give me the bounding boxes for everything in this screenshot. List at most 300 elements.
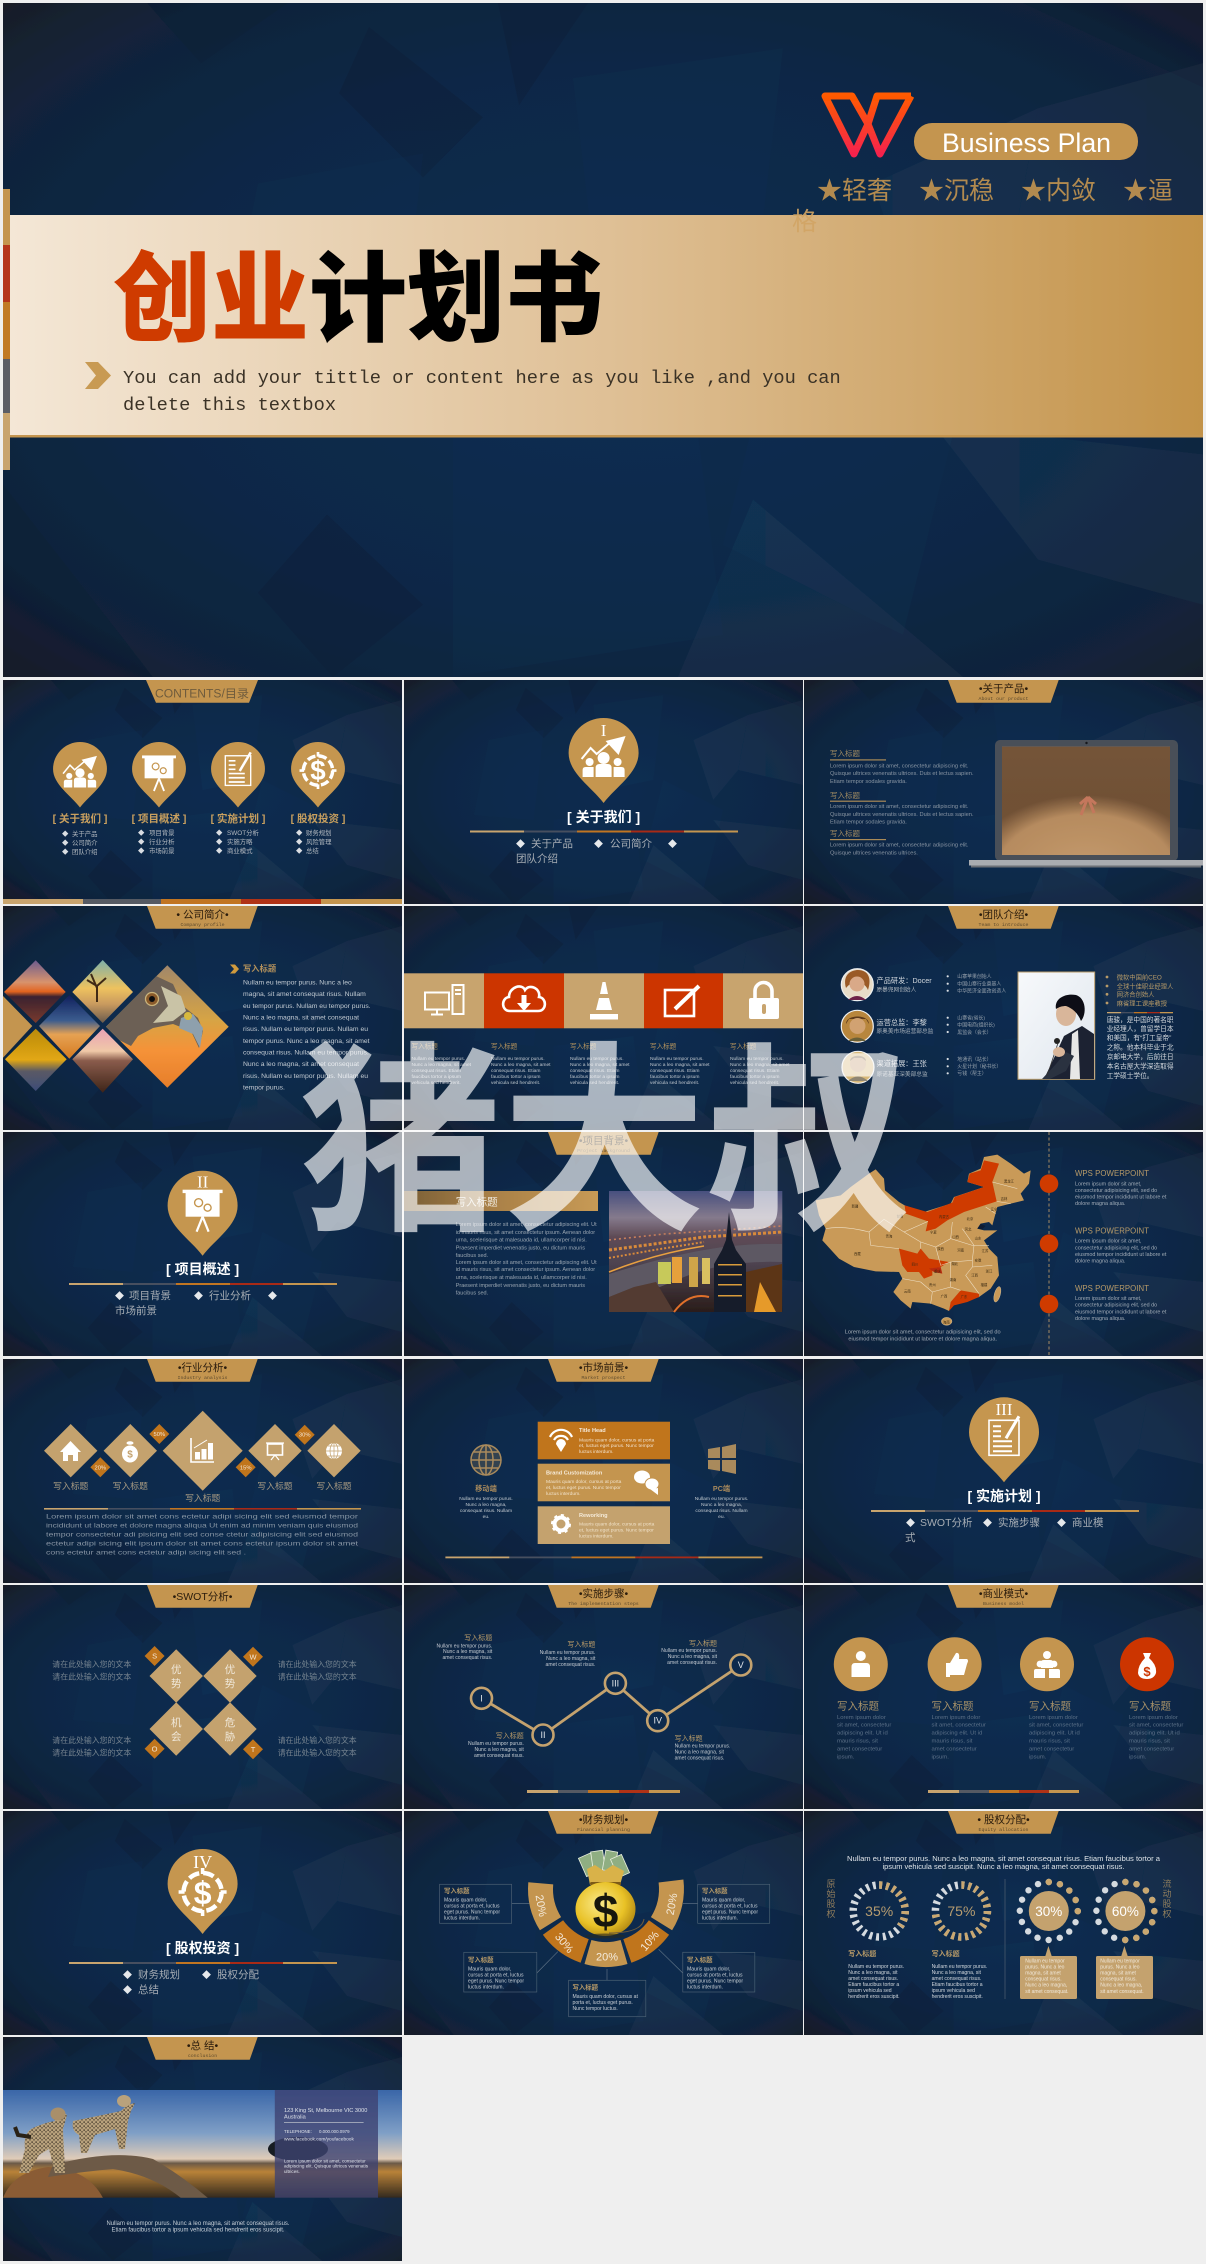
icon: board [266, 1443, 284, 1460]
column 2 text [932, 1715, 986, 1760]
map: 贵州 [929, 1282, 936, 1287]
contents list: 公司简介 [72, 838, 98, 847]
divider [1004, 1879, 1006, 1999]
biography: 本名古屋大学深造取得 [1107, 1062, 1174, 1070]
box: reworking: Reworking [579, 1513, 608, 1519]
icon: globe [471, 1445, 501, 1475]
pin: implementation plan [211, 742, 265, 808]
contents list: 关于产品 [72, 829, 98, 838]
SWOT diamonds: 胁 [225, 1730, 236, 1743]
names: 原奥美市场运营部总监 [876, 1027, 934, 1035]
text block [243, 964, 371, 1092]
text block right: hendrerit eros suscipit. [932, 1994, 983, 2000]
panel: section III [804, 1359, 1203, 1583]
column 3 text: ipsum. [1029, 1754, 1047, 1760]
circle: money [1120, 1637, 1174, 1691]
icon: house [60, 1441, 81, 1461]
map: 四川 [912, 1263, 918, 1267]
column text 4: Nunc a leo magna, sit amet [650, 1062, 710, 1068]
heading band: 写入标题 [456, 1196, 498, 1208]
column 1 text: ipsum. [837, 1754, 855, 1760]
vertical label: floating equity: 流 [1162, 1878, 1172, 1889]
contents headings: [ 关于我们 ] [53, 812, 107, 825]
map: 山东 [975, 1235, 982, 1240]
icon: W logo [825, 96, 911, 154]
map: 陕西 [937, 1246, 945, 1251]
SWOT diamonds: 优 [225, 1663, 235, 1676]
tab [548, 1811, 659, 1834]
names: 渠道拓展：王张 [876, 1059, 927, 1068]
SWOT right text: 请在此处输入您的文本 [278, 1748, 357, 1758]
callout 4: luctus interdum. [687, 1984, 723, 1990]
biography: 工学硕士学位。 [1107, 1071, 1154, 1080]
section list: 商业模 [1072, 1516, 1104, 1529]
text block right [932, 1949, 987, 2000]
speech box 2: purus. Nunc a leo [1100, 1964, 1140, 1970]
gauge 30% [1020, 1882, 1078, 1940]
column 4 text: amet consectetur [1129, 1746, 1174, 1752]
section heading: [ 股权投资 ] [166, 1940, 239, 1956]
column 1 text: mauris risus, sit [837, 1738, 878, 1744]
icon: money bag: $ [593, 1885, 618, 1937]
step text I [437, 1633, 493, 1661]
pin: project overview [132, 742, 186, 808]
percent tags [90, 1424, 315, 1477]
ring segments: 20% [596, 1952, 618, 1964]
column 2 text: adipiscing elit. Ut id [932, 1730, 982, 1736]
icon: money bag [122, 1441, 138, 1462]
contents list: ◆ [296, 838, 303, 846]
speech box 1: magna, sit amet [1025, 1970, 1061, 1976]
section list: 总结 [138, 1983, 159, 1996]
contact panel: TELEPHONE: [284, 2129, 312, 2134]
map: 宁夏 [930, 1230, 937, 1235]
tab [548, 1585, 659, 1608]
contents list: ◆ [216, 829, 223, 837]
text block 1: Etiam tempor sodales gravida. [830, 779, 907, 785]
column 4 text: mauris risus, sit [1129, 1738, 1170, 1744]
step text IV: amet consequat risus. [675, 1756, 724, 1762]
step text II: Nullam eu tempor purus. [468, 1741, 524, 1747]
callout 5: 写入标题 [572, 1982, 599, 1991]
map point 2: dolore magna aliqua. [1075, 1259, 1125, 1265]
callout 3 [464, 1952, 537, 1992]
contents headings: [ 实施计划 ] [211, 812, 265, 825]
contents list: ◆ [62, 839, 69, 847]
vertical label: floating equity: 权 [1162, 1908, 1172, 1919]
right bullets: 全球十佳职业经理人 [1117, 981, 1174, 990]
contents list: 项目背景 [149, 828, 175, 837]
column text 2: vehicula sed hendrerit. [491, 1080, 540, 1086]
box: reworking [538, 1506, 670, 1544]
step text IV: Nunc a leo magna, sit [675, 1750, 724, 1756]
map point 3: dolore magna aliqua. [1075, 1316, 1125, 1322]
paragraph: Praesent imperdiet venenatis justo, eu dictum mauris [456, 1283, 585, 1289]
map: 吉林 [1001, 1196, 1008, 1201]
step nodes: III [612, 1678, 619, 1688]
map point 2: consectetur adipisicing elit, sed do [1075, 1245, 1157, 1251]
map [816, 1155, 1031, 1325]
divider stripe [44, 1508, 361, 1510]
tab: The implementation steps [568, 1601, 639, 1607]
map point 2: eiusmod tempor incididunt ut labore et [1075, 1252, 1167, 1258]
map: 山西 [952, 1234, 960, 1239]
gauge 75%: 75% [947, 1903, 975, 1919]
step text IV [675, 1734, 730, 1762]
column 3 text: adipiscing elit. Ut id [1029, 1730, 1080, 1736]
SWOT diamonds: 危 [225, 1717, 236, 1729]
paragraph: id mauris risus, sit amet consectetur ipsum. Aenean dolor [456, 1230, 595, 1236]
box: reworking: et, luctus eget purus. Nunc tempor [579, 1528, 654, 1534]
pin: equity investment: $ [310, 755, 326, 786]
tab: •行业分析• [178, 1361, 227, 1374]
text block 3 [830, 828, 969, 856]
step text II: Nunc a leo magna, sit [475, 1747, 524, 1753]
SWOT right text [278, 1659, 357, 1758]
vertical label: original equity: 权 [826, 1908, 836, 1919]
pin I: I [601, 721, 607, 740]
contents list: 商业模式 [227, 846, 253, 855]
ring segments [528, 1880, 684, 1967]
biography [1107, 1015, 1174, 1080]
map: 江西 [971, 1272, 979, 1277]
panel: equity allocation [804, 1811, 1203, 2035]
diamond labels [53, 1480, 352, 1503]
text block 3: 写入标题 [830, 828, 860, 838]
text block 3: Quisque ultrices venenatis ultrices. [830, 850, 918, 856]
speech box 2 [1096, 1946, 1153, 1999]
step text I: 写入标题 [464, 1633, 492, 1642]
icon: computer [425, 985, 464, 1014]
paragraph: id mauris risus, sit amet consectetur ipsum. Aenean dolor [456, 1267, 595, 1273]
icon: traffic cone [590, 982, 618, 1020]
tab: Company profile [180, 922, 225, 928]
speech box 2: Nunc a leo magna, [1100, 1982, 1142, 1988]
tab: •财务规划• [579, 1813, 628, 1826]
pin II [168, 1171, 238, 1256]
callout 4: Mauris quam dolor, [687, 1966, 730, 1972]
section list: ◆ [268, 1291, 277, 1301]
section list: 关于产品 [531, 837, 573, 850]
tab [948, 906, 1059, 929]
step nodes: I [480, 1694, 483, 1704]
tab: •项目背景• [579, 1134, 628, 1147]
column text 3: faucibus tortor a ipsum [570, 1074, 619, 1080]
section list: ◆ [906, 1518, 915, 1528]
map caption: eiusmod tempor incididunt ut labore et dolore magna aliqua. [848, 1336, 997, 1342]
title: 创业计划书 [113, 220, 603, 362]
map point 2: Lorem ipsum dolor sit amet, [1075, 1239, 1142, 1245]
column labels: 写入标题 [837, 1700, 879, 1712]
section list: ◆ [194, 1291, 203, 1301]
contents list: 团队介绍 [72, 847, 98, 856]
SWOT right text: 请在此处输入您的文本 [278, 1735, 357, 1745]
intro text: Nullam eu tempor purus. Nunc a leo magna, sit amet consequat risus. Etiam faucibus tortor a [847, 1856, 1160, 1863]
vertical label: floating equity: 动 [1162, 1889, 1172, 1899]
tab [147, 1359, 258, 1382]
map: 福建 [981, 1282, 988, 1287]
SWOT diamonds: 势 [171, 1677, 182, 1690]
paragraph: faucibus sed. [456, 1253, 489, 1259]
SWOT right text: 请在此处输入您的文本 [278, 1672, 357, 1682]
tagline stars: ★轻奢 [817, 177, 892, 205]
tab: • 股权分配• [977, 1813, 1030, 1826]
cover subtitle: You can add your tittle or content here as you like ,and you can [123, 367, 841, 389]
tab: conclusion [188, 2053, 217, 2059]
callout 4 [683, 1952, 755, 1992]
monospace paragraph: tempor consectetur adi pisicing elit sed conse ctetur adipisicing elit sed eiusmod [46, 1532, 358, 1539]
text block 2: Etiam tempor sodales gravida. [830, 820, 907, 826]
PC column: consequat risus. Nullam [695, 1508, 748, 1514]
SWOT diamonds: 机 [171, 1716, 182, 1729]
speech box 1: Nullam eu tempor [1025, 1958, 1065, 1964]
step text V: amet consequat risus. [667, 1660, 717, 1666]
box: title head: luctus interdum. [579, 1449, 614, 1455]
section list: ◆ [123, 1985, 132, 1995]
gauge 60% [1096, 1882, 1154, 1940]
column text 5: faucibus tortor a ipsum [730, 1074, 779, 1080]
gauge 75% [935, 1885, 987, 1937]
tab [948, 1811, 1059, 1834]
connectors [512, 1904, 698, 1980]
panel: about our product [804, 680, 1203, 904]
text block 1: 写入标题 [830, 748, 860, 758]
paragraph: Praesent imperdiet venenatis justo, eu dictum mauris [456, 1246, 585, 1252]
intro text [847, 1856, 1160, 1871]
badge: Business Plan [914, 123, 1138, 160]
map caption: Lorem ipsum dolor sit amet, consectetur adipisicing elit, sed do [845, 1330, 1001, 1336]
text block left: amet consequat risus. [848, 1976, 898, 1982]
text block right: Etiam faucibus tortor a [932, 1982, 983, 1988]
column text 4: Nullam eu tempor purus. [650, 1056, 704, 1062]
callout 1: eget purus. Nunc tempor [444, 1910, 500, 1916]
contents list: 市场前景 [149, 846, 175, 855]
column 4 text: adipiscing elit. Ut id [1129, 1730, 1180, 1736]
column 3 text: mauris risus, sit [1029, 1738, 1070, 1744]
box: brand customization: et, luctus eget purus. Nunc tempor [546, 1485, 621, 1491]
column text 5 [730, 1042, 790, 1086]
tab [548, 1132, 659, 1155]
contents list: 总结 [306, 846, 319, 855]
map point 3: consectetur adipisicing elit, sed do [1075, 1303, 1157, 1309]
tab [548, 1359, 659, 1382]
text block: Nunc a leo magna, sit amet consequat [243, 1014, 359, 1022]
callout 5: Nunc tempor luctus. [572, 2006, 618, 2012]
callout 4: 写入标题 [687, 1955, 713, 1964]
callout 2: luctus interdum. [702, 1916, 738, 1922]
section stripe [69, 1283, 337, 1285]
column text 2: consequat risus. Etiam [491, 1068, 540, 1074]
contents headings: [ 项目概述 ] [132, 812, 186, 825]
section list [123, 1968, 259, 1996]
tab: Equity allocation [979, 1827, 1029, 1833]
box: title head: Mauris quam dolor, cursus at porta [579, 1438, 655, 1444]
map: 海南 [943, 1319, 950, 1324]
step text V [661, 1638, 718, 1666]
step text I: Nullam eu tempor purus. [437, 1644, 492, 1650]
section list [115, 1289, 277, 1317]
bullets: 中国山寨行业奠基人 [957, 980, 1001, 988]
tab: • 公司简介• [176, 908, 229, 921]
closing text: Etiam faucibus tortor a ipsum vehicula sed hendrerit eros suscipit. [112, 2228, 285, 2234]
text block left: Nullam eu tempor purus. [848, 1964, 904, 1970]
panel: conclusion [3, 2037, 402, 2261]
gauge 60%: 60% [1112, 1904, 1139, 1919]
map: 云南 [904, 1288, 911, 1293]
SWOT left text: 请在此处输入您的文本 [52, 1659, 131, 1669]
text block: Nullam eu tempor purus. Nunc a leo [243, 980, 352, 986]
closing text: Nullam eu tempor purus. Nunc a leo magna, sit amet consequat risus. [106, 2221, 290, 2227]
box: title head [538, 1422, 670, 1459]
text block 2 [830, 790, 974, 826]
map point 3: eiusmod tempor incididunt ut labore et [1075, 1309, 1167, 1315]
biography: 和美国，有“打工皇帝” [1107, 1033, 1171, 1042]
SWOT diamonds: 势 [225, 1677, 236, 1690]
diamond labels: 写入标题 [113, 1480, 148, 1491]
bottom colour stripe [3, 899, 402, 904]
callout 2: Mauris quam dolor, [702, 1898, 745, 1904]
section list: 团队介绍 [516, 852, 558, 865]
percent tags: 20% [94, 1465, 106, 1471]
panel: icon strip slide [404, 906, 803, 1130]
column text 1 [412, 1042, 472, 1086]
section stripe [69, 1962, 337, 1964]
step text II: 写入标题 [496, 1731, 524, 1740]
step text IV: 写入标题 [675, 1734, 703, 1742]
contact panel [275, 2090, 378, 2198]
box: reworking: luctus interdum. [579, 1534, 614, 1540]
column text 1: Nunc a leo magna, sit amet [412, 1062, 472, 1068]
percent tags: 50% [153, 1432, 165, 1438]
SWOT tags: O [152, 1744, 158, 1753]
section list: 行业分析 [209, 1289, 251, 1302]
panel: SWOT analysis [3, 1585, 402, 1809]
timeline nodes [1040, 1174, 1058, 1313]
column 4 text: Lorem ipsum dolor [1129, 1715, 1178, 1721]
section list: ◆ [115, 1291, 124, 1301]
section list: ◆ [123, 1970, 132, 1980]
map point 1: Lorem ipsum dolor sit amet, [1075, 1181, 1142, 1187]
column 1 text: sit amet, consectetur [837, 1723, 891, 1729]
panel: business model [804, 1585, 1203, 1809]
section list: 市场前景 [115, 1304, 157, 1317]
names [876, 976, 934, 1078]
gauge 30%: 30% [1035, 1904, 1062, 1919]
dashed timeline [1048, 1132, 1050, 1356]
text block 2: Quisque ultrices venenatis ultrices. Duis et lectus sapien. [830, 812, 974, 818]
bullets: 黑监会（会长） [957, 1029, 992, 1036]
map point 2 [1075, 1226, 1167, 1265]
contents list: 行业分析 [149, 837, 175, 846]
names: 运营总监：李黎 [876, 1018, 927, 1027]
panel: implementation steps [404, 1585, 803, 1809]
tab: Project background [577, 1148, 630, 1154]
section list [516, 837, 677, 865]
contents list [62, 828, 332, 856]
icon strip [404, 973, 803, 1028]
section list: SWOT分析 [920, 1516, 973, 1529]
contact panel: Lorem ipsum dolor sit amet, consectetur [284, 2158, 366, 2164]
callout 2 [698, 1884, 770, 1923]
tagline stars: ★逼 [1123, 177, 1173, 205]
panel: section II [3, 1132, 402, 1356]
text block: tempor purus. [243, 1084, 285, 1092]
tagline stars: 格 [792, 208, 817, 236]
box: title head: et, luctus eget purus. Nunc tempor [579, 1443, 654, 1449]
contents list: 财务规划 [306, 828, 332, 837]
step text IV: Nullam eu tempor purus. [675, 1744, 730, 1750]
bullets: 山寨省(省长) [957, 1014, 985, 1022]
biography: 业经理人，曾留学日本 [1107, 1024, 1174, 1033]
column text 3 [570, 1042, 630, 1086]
diamond labels: 写入标题 [185, 1492, 220, 1503]
step text III [540, 1640, 596, 1668]
text block left: Etiam faucibus tortor a [848, 1982, 899, 1988]
tab: •市场前景• [579, 1361, 628, 1374]
column 1 text: amet consectetur [837, 1746, 882, 1752]
bullets: 中国电商(组织长) [957, 1022, 995, 1028]
column 4 text: sit amet, consectetur [1129, 1723, 1183, 1729]
map: 西藏 [854, 1251, 861, 1256]
column text 2: faucibus tortor a ipsum [491, 1074, 540, 1080]
avatar 3 [842, 1051, 874, 1083]
text block left: hendrerit eros suscipit. [848, 1994, 900, 2000]
tab [948, 1585, 1059, 1608]
section list: 股权分配 [217, 1968, 259, 1981]
box: brand customization: Brand Customization [546, 1470, 603, 1476]
column text 4: vehicula sed hendrerit. [650, 1080, 699, 1086]
contents list: ◆ [216, 847, 223, 855]
map point 1 [1075, 1169, 1167, 1207]
icon: chevron [85, 362, 111, 389]
circle: team [1020, 1637, 1074, 1691]
SWOT right text: 请在此处输入您的文本 [278, 1659, 357, 1669]
tab: •团队介绍• [979, 908, 1028, 921]
bullets [947, 973, 1006, 1077]
PC column: Nunc a leo magna, [701, 1502, 742, 1508]
contents list: SWOT分析 [227, 828, 260, 837]
monospace paragraph: cons ectetur amet cons ectetur adipi sicing elit sed . [46, 1549, 246, 1556]
monospace paragraph: incididunt ut labore et dolore magna aliqua Ut enim ad minim veniam quis eiusmod [46, 1523, 358, 1530]
right bullets: 网济合创始人 [1117, 990, 1155, 999]
contents headings: [ 股权投资 ] [291, 812, 345, 825]
callout 2: cursus at porta et, luctus [702, 1904, 758, 1910]
avatar 2 [841, 1010, 873, 1042]
column 1 text: adipiscing elit. Ut id [837, 1730, 888, 1736]
text block right: 写入标题 [932, 1949, 960, 1958]
map: 黑龙江 [1004, 1178, 1015, 1183]
pin IV: IV [193, 1852, 212, 1872]
text block: magna, sit amet consequat risus. Nullam [243, 991, 366, 998]
SWOT diamonds [150, 1649, 257, 1756]
names: 原诺基亚深美部总监 [876, 1070, 928, 1078]
divider stripe [527, 1790, 680, 1793]
callout 3: Mauris quam dolor, [468, 1966, 511, 1972]
text block right: Nunc a leo magna, sit [932, 1970, 981, 1976]
speech box 1: Nunc a leo magna, [1025, 1982, 1067, 1988]
column text 4: 写入标题 [650, 1042, 677, 1050]
column 3 text: Lorem ipsum dolor [1029, 1715, 1078, 1721]
text block: Nunc a leo magna, sit amet consequat [243, 1061, 359, 1068]
icon: note and pencil [665, 986, 699, 1016]
box: reworking: Mauris quam dolor, cursus at porta [579, 1522, 655, 1528]
vertical label: floating equity: 股 [1162, 1899, 1172, 1909]
column text 2: 写入标题 [491, 1042, 518, 1050]
callout 1: Mauris quam dolor, [444, 1898, 487, 1904]
SWOT diamonds: 会 [171, 1730, 182, 1743]
box: title head: Title Head [579, 1428, 606, 1434]
bullets: 地通讯（站长） [957, 1056, 992, 1063]
